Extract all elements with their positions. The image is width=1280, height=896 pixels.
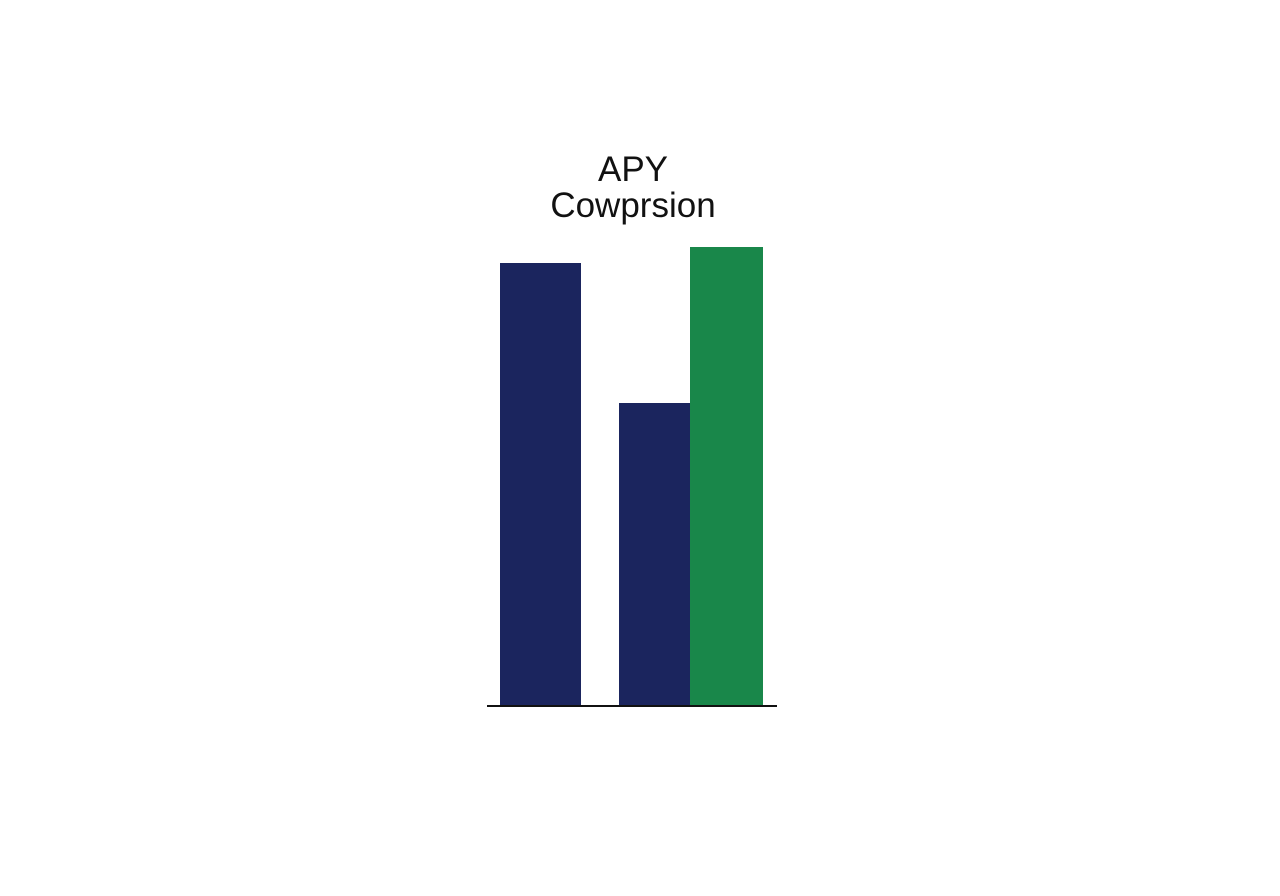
bar 1: [500, 263, 581, 706]
title: Cowprsion: [550, 186, 716, 225]
title: [550, 150, 716, 225]
title: APY: [598, 150, 668, 189]
bar 2: [619, 403, 690, 706]
bar 3: [690, 247, 763, 706]
axis: [487, 705, 777, 707]
bar chart: [487, 247, 777, 707]
